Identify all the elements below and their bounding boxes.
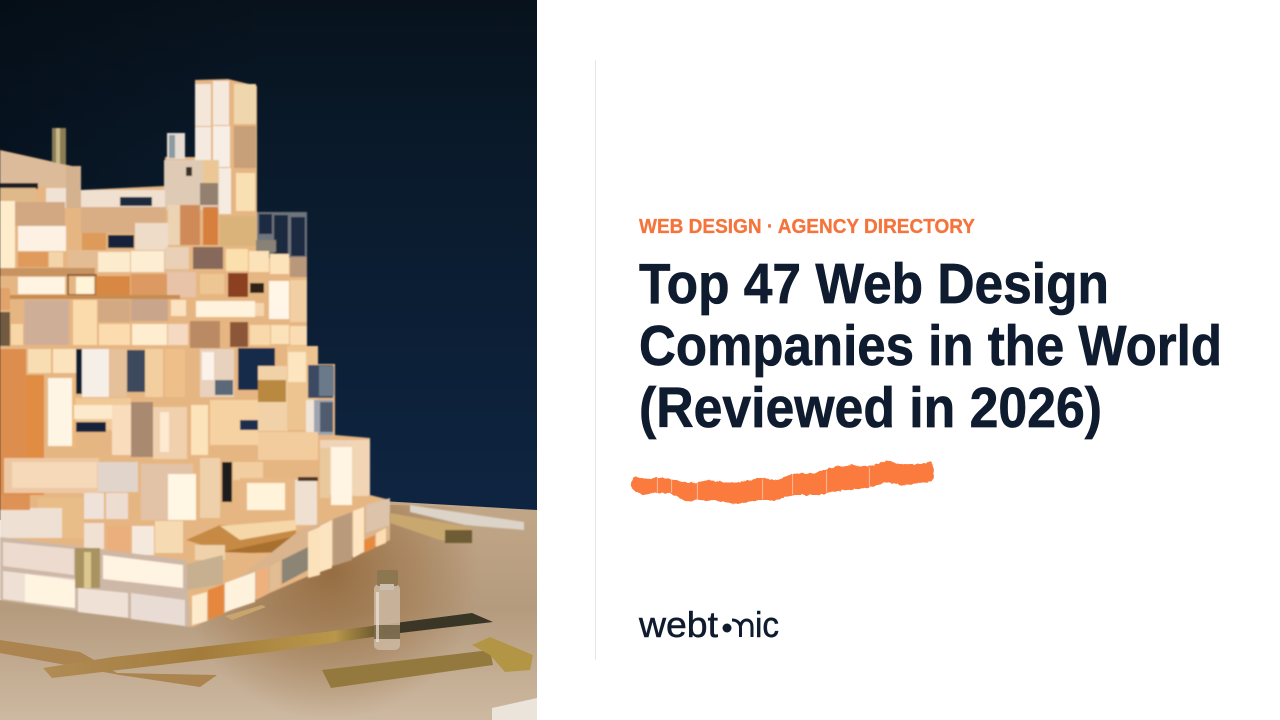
- glass bottle: [374, 570, 400, 650]
- panel: photo of illuminated architectural model: [0, 0, 537, 720]
- webtonic logo: [638, 605, 779, 645]
- small bracket: [225, 605, 266, 620]
- inner courtyard: [186, 520, 296, 560]
- main title: [639, 252, 1222, 440]
- white paper corner: [492, 698, 537, 720]
- category eyebrow: WEB DESIGN · AGENCY DIRECTORY: [639, 216, 976, 238]
- front wall of model: [0, 537, 190, 627]
- left orange column: [0, 349, 76, 509]
- dark navy curtain background: [0, 0, 537, 520]
- right side wall of model: [187, 498, 390, 626]
- main title: Top 47 Web Design: [639, 252, 1109, 316]
- brass hammer: [322, 637, 533, 688]
- glass box on terrace: [256, 212, 307, 258]
- vertical divider: [595, 60, 596, 660]
- orange brush stroke underline: [630, 460, 934, 504]
- central openings showing navy background: [76, 348, 275, 397]
- middle rows of panels: [0, 247, 307, 348]
- long brass ruler: [43, 613, 493, 678]
- webtonic logo: ic: [755, 605, 779, 645]
- chimney and tower windows: [52, 81, 256, 214]
- wooden table: [0, 498, 537, 720]
- webtonic logo: webt: [638, 605, 718, 645]
- back ruler and white strip on table: [390, 505, 524, 543]
- middle ledge with lit rooms: [0, 458, 318, 555]
- right towers with glass: [258, 346, 334, 435]
- lower brass ruler: [0, 640, 217, 687]
- central floors and small tower: [74, 398, 370, 505]
- upper left roof block: [0, 151, 256, 268]
- architectural model: [0, 79, 390, 627]
- main title: (Reviewed in 2026): [639, 376, 1102, 440]
- model silhouette: [0, 79, 390, 627]
